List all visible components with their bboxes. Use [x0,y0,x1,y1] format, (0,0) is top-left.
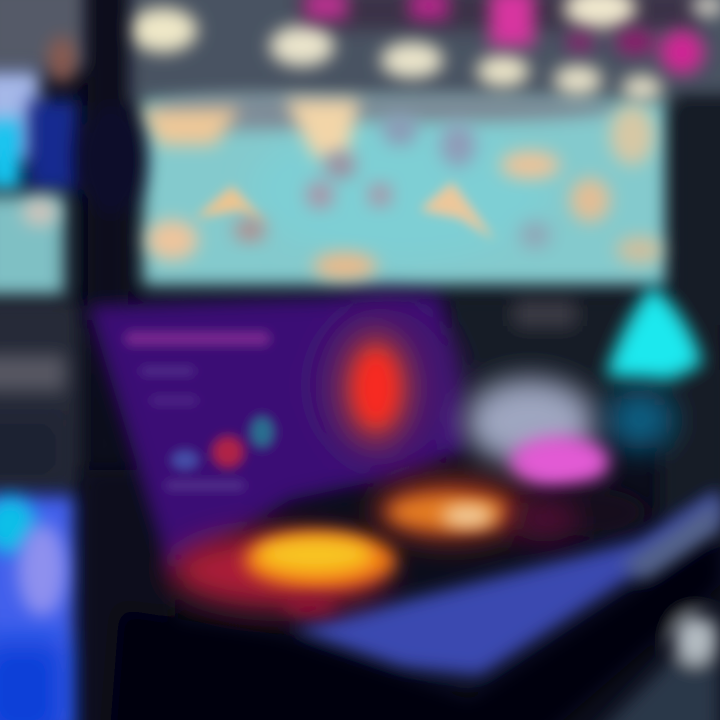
rear plate of food [374,478,579,542]
front plate of food [170,532,396,615]
ceiling lights [129,0,720,101]
panel: left window strip [0,0,90,720]
panel: purple board [88,294,464,572]
dark vertical pillar [78,0,175,720]
red glow on board [340,332,412,444]
board text lines [140,368,245,489]
blue table surface [290,490,720,676]
black table edge [110,535,720,720]
panel: patterned teal wall [140,94,668,286]
panel: dark right side [445,95,720,520]
cyan lamp shape [606,284,702,450]
magenta ceiling accents [305,0,704,74]
panel: ceiling band [120,0,720,105]
small board chart [171,416,274,470]
light pedestal and pink bowl [464,378,646,536]
board heading glow [125,332,270,345]
